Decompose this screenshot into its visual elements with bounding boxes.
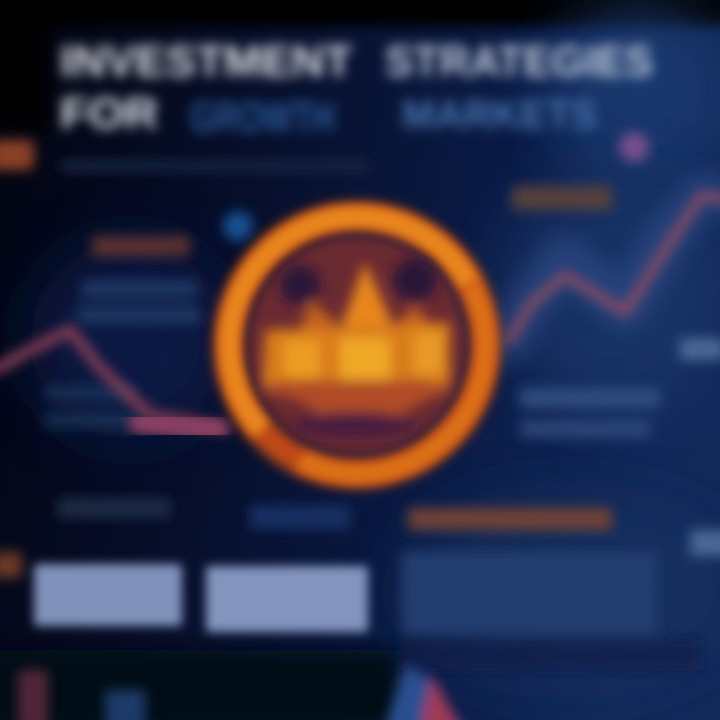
title: GROWTH xyxy=(190,93,335,142)
blue marker xyxy=(223,211,253,241)
orange corner marker xyxy=(0,140,34,170)
left heading xyxy=(92,236,190,256)
right heading xyxy=(512,186,612,210)
lower right heading xyxy=(408,508,612,530)
right text blocks xyxy=(520,388,660,438)
right edge markers xyxy=(680,338,720,556)
lower left labels xyxy=(0,498,350,578)
pink marker xyxy=(619,132,649,162)
title: MARKETS xyxy=(402,93,597,137)
card 1 xyxy=(34,564,182,626)
left text block xyxy=(45,280,200,428)
title: FOR xyxy=(60,89,158,138)
subtitle xyxy=(60,160,370,172)
title xyxy=(60,37,653,142)
line chart: right rising xyxy=(510,195,720,340)
bottom mini chart xyxy=(18,665,465,720)
lower right panel xyxy=(400,552,700,670)
title: INVESTMENT xyxy=(60,37,352,86)
line chart: left falling xyxy=(0,330,225,430)
central emblem xyxy=(229,217,485,473)
card 2 xyxy=(206,566,368,632)
title: STRATEGIES xyxy=(385,37,653,86)
emblem: inner flame and bars xyxy=(258,258,452,438)
